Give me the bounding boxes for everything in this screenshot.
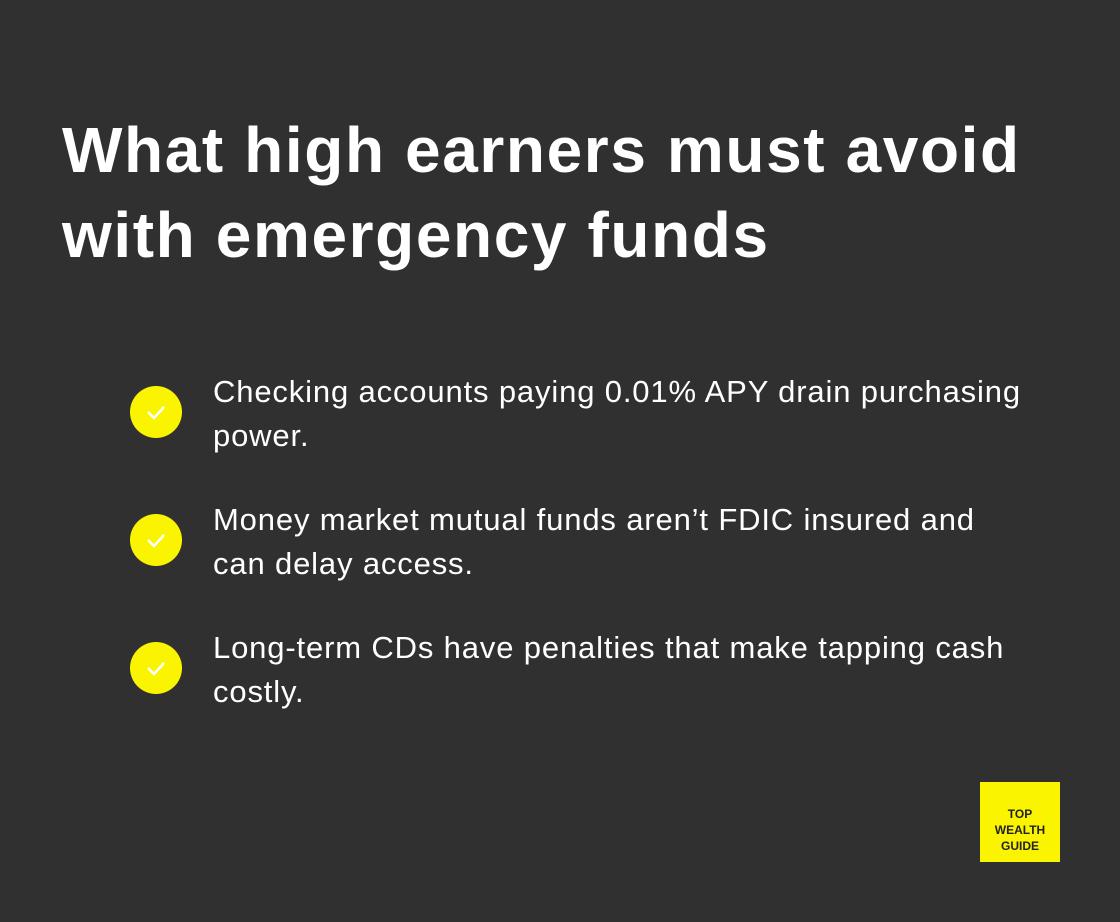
icon: check	[130, 642, 182, 694]
logo: TOP	[1008, 807, 1032, 821]
title	[62, 114, 1021, 271]
text 3	[213, 630, 1004, 709]
title: with emergency funds	[62, 199, 770, 271]
logo: GUIDE	[1001, 839, 1039, 853]
text 1: Checking accounts paying 0.01% APY drain purchasing	[213, 374, 1021, 409]
text 1: power.	[213, 418, 309, 453]
icon: check	[130, 386, 182, 438]
text 2: can delay access.	[213, 546, 474, 581]
text 2	[213, 502, 975, 581]
text 2: Money market mutual funds aren’t FDIC insured and	[213, 502, 975, 537]
logo	[980, 782, 1060, 862]
text 3: costly.	[213, 674, 305, 709]
item 3	[130, 630, 1004, 709]
item 2	[130, 502, 975, 581]
text 3: Long-term CDs have penalties that make tapping cash	[213, 630, 1004, 665]
item 1	[130, 374, 1021, 453]
icon: check	[130, 514, 182, 566]
text 1	[213, 374, 1021, 453]
logo: WEALTH	[995, 823, 1045, 837]
title: What high earners must avoid	[62, 114, 1021, 186]
